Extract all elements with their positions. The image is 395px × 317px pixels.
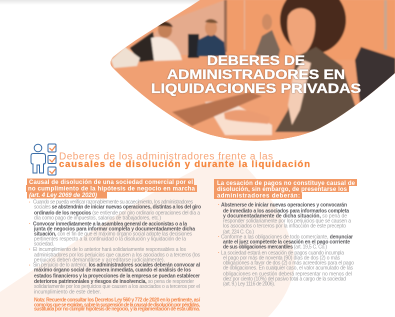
left bullet list: deterioros patrimoniales y riesgos de insolvencia, so pena de responder <box>34 279 194 285</box>
title: DEBERES DE <box>207 53 305 68</box>
left highlighted heading: no cumplimiento de la hipótesis de negocio en marcha <box>28 186 196 192</box>
icon: person with checklist <box>31 144 56 175</box>
left bullet list: día como pago de impuestos, salarios de trabajadores, etc.) <box>34 216 161 222</box>
left bullet list: · <box>29 247 31 253</box>
right bullet list: · <box>218 250 220 256</box>
right bullet list: diez por ciento (10%) del pasivo total a cargo de la sociedad <box>223 276 346 282</box>
left bullet list: sociedad. <box>34 242 54 248</box>
left bullet list: Cuando se pueda verificar razonablemente su acaecimiento, los administradores <box>33 200 194 206</box>
title <box>151 53 361 96</box>
right highlighted heading <box>214 179 357 200</box>
right bullet list: el pago por más de noventa (90) días de dos (2) o más <box>223 256 340 262</box>
right bullet list: · <box>218 234 220 240</box>
right bullet list: Conforme a las obligaciones de todo comerciante, denunciar <box>221 234 353 240</box>
hero photo <box>100 0 395 150</box>
left bullet list: · <box>29 263 31 269</box>
left bullet list: Sin perjuicio de lo anterior, los administradores sociales deberán convocar al <box>33 262 201 268</box>
right bullet list: responder solidariamente por los perjuicios que se causen a <box>223 218 351 224</box>
right bullet list: · <box>218 202 220 208</box>
left highlighted heading: Causal de disolución de una sociedad comercial por el <box>29 180 193 186</box>
left bullet list: administradores por los perjuicios que causen a los asociados o a terceros (los <box>34 252 200 258</box>
left bullet list: incumplimiento de este deber. <box>34 290 101 296</box>
top edge shade <box>0 0 395 5</box>
section heading: causales de disolución y durante la liquidación <box>59 159 310 170</box>
left bullet list: junta de negocios para informar completa y documentadamente dicha <box>33 226 195 232</box>
left bullet list: sociales se abstendrán de iniciar nuevas operaciones, distintas a los del giro <box>34 204 201 210</box>
section heading <box>59 152 310 170</box>
right highlighted heading: disolución, sin embargo, de presentarse los <box>217 187 348 193</box>
note: como los que se expidan, sobre la suspensión de la causal de disolución por pérdidas, <box>34 302 201 308</box>
left bullet list <box>29 200 201 296</box>
panel: left column <box>26 178 201 312</box>
right bullet list: Abstenerse de iniciar nuevas operaciones y convocarán <box>221 202 347 208</box>
title: LIQUIDACIONES PRIVADAS <box>151 81 361 96</box>
right bullet list: (art. 224 C. Co.) <box>223 230 254 236</box>
right bullet list: y documentadamente de dicha situación, so pena de <box>223 214 347 220</box>
note <box>34 298 201 312</box>
section heading: Deberes de los administradores frente a las <box>59 152 273 162</box>
right bullet list: obligaciones en cuestión deberá representar no menos del <box>223 272 352 278</box>
left bullet list: estados financieros y la proyecciones de la empresa se puedan establecer <box>34 274 200 280</box>
left bullet list: El incumplimiento de lo anterior hará solidariamente responsables a los <box>33 247 186 253</box>
panel: right column <box>214 179 357 288</box>
right bullet list: (art. 9.) Ley 1116 de 2006). <box>223 282 275 288</box>
left bullet list: máximo órgano social de manera inmediata, cuando el análisis de los <box>34 268 191 274</box>
left bullet list: ordinario de los negocios (se entiende por giro ordinario operaciones del día a <box>34 210 200 216</box>
left bullet list: · <box>29 222 31 228</box>
right bullet list <box>218 202 354 288</box>
right bullet list: de sus obligaciones mercantiles (art. 19,5 C. Co.) <box>223 244 327 250</box>
right bullet list: ante el juez competente la cesación en el pago corriente <box>223 240 350 246</box>
note: sustituida por no cumplir hipótesis de negocio, y la reglamentación de esta última. <box>34 306 201 312</box>
left highlighted heading: (art. 4 Ley 2069 de 2020) <box>29 193 97 199</box>
right bullet list: obligaciones a favor de dos (2) o más acreedores para el pago <box>223 260 354 266</box>
background peach shape <box>0 157 295 317</box>
left bullet list: pertinentes respecto a la continuidad o la disolución y liquidación de la <box>34 236 186 242</box>
note: Nota: Recuerde consultar los Decretos Ley 560 y 772 de 2020 en lo pertinente, así <box>34 298 201 304</box>
left bullet list: situación, con el fin de que el máximo órgano social adopte las decisiones <box>34 232 192 238</box>
left bullet list: · <box>29 200 31 206</box>
right highlighted heading: administradores deberán: <box>217 194 300 200</box>
right bullet list: La sociedad estará en cesación de pagos cuando incumpla <box>221 250 344 256</box>
left highlighted heading <box>26 178 197 199</box>
left bullet list: perjuicios deben demandarse y acreditarse judicialmente). <box>34 258 165 264</box>
right highlighted heading: La cesación de pagos no constituye causal de <box>217 181 356 187</box>
right bullet list: los asociados o terceros por la infracción de este precepto <box>223 224 346 230</box>
right bullet list: de obligaciones. En cualquier caso, el valor acumulado de las <box>223 266 354 272</box>
right bullet list: de inmediato a los asociados para informarlos completa <box>223 208 349 214</box>
title: ADMINISTRADORES EN <box>167 67 345 82</box>
left bullet list: Convocar inmediatamente a la asamblea general de accionistas o a la <box>33 222 187 228</box>
left bullet list: solidariamente por los perjuicios que causen a los asociados o a terceros por el <box>34 284 200 290</box>
